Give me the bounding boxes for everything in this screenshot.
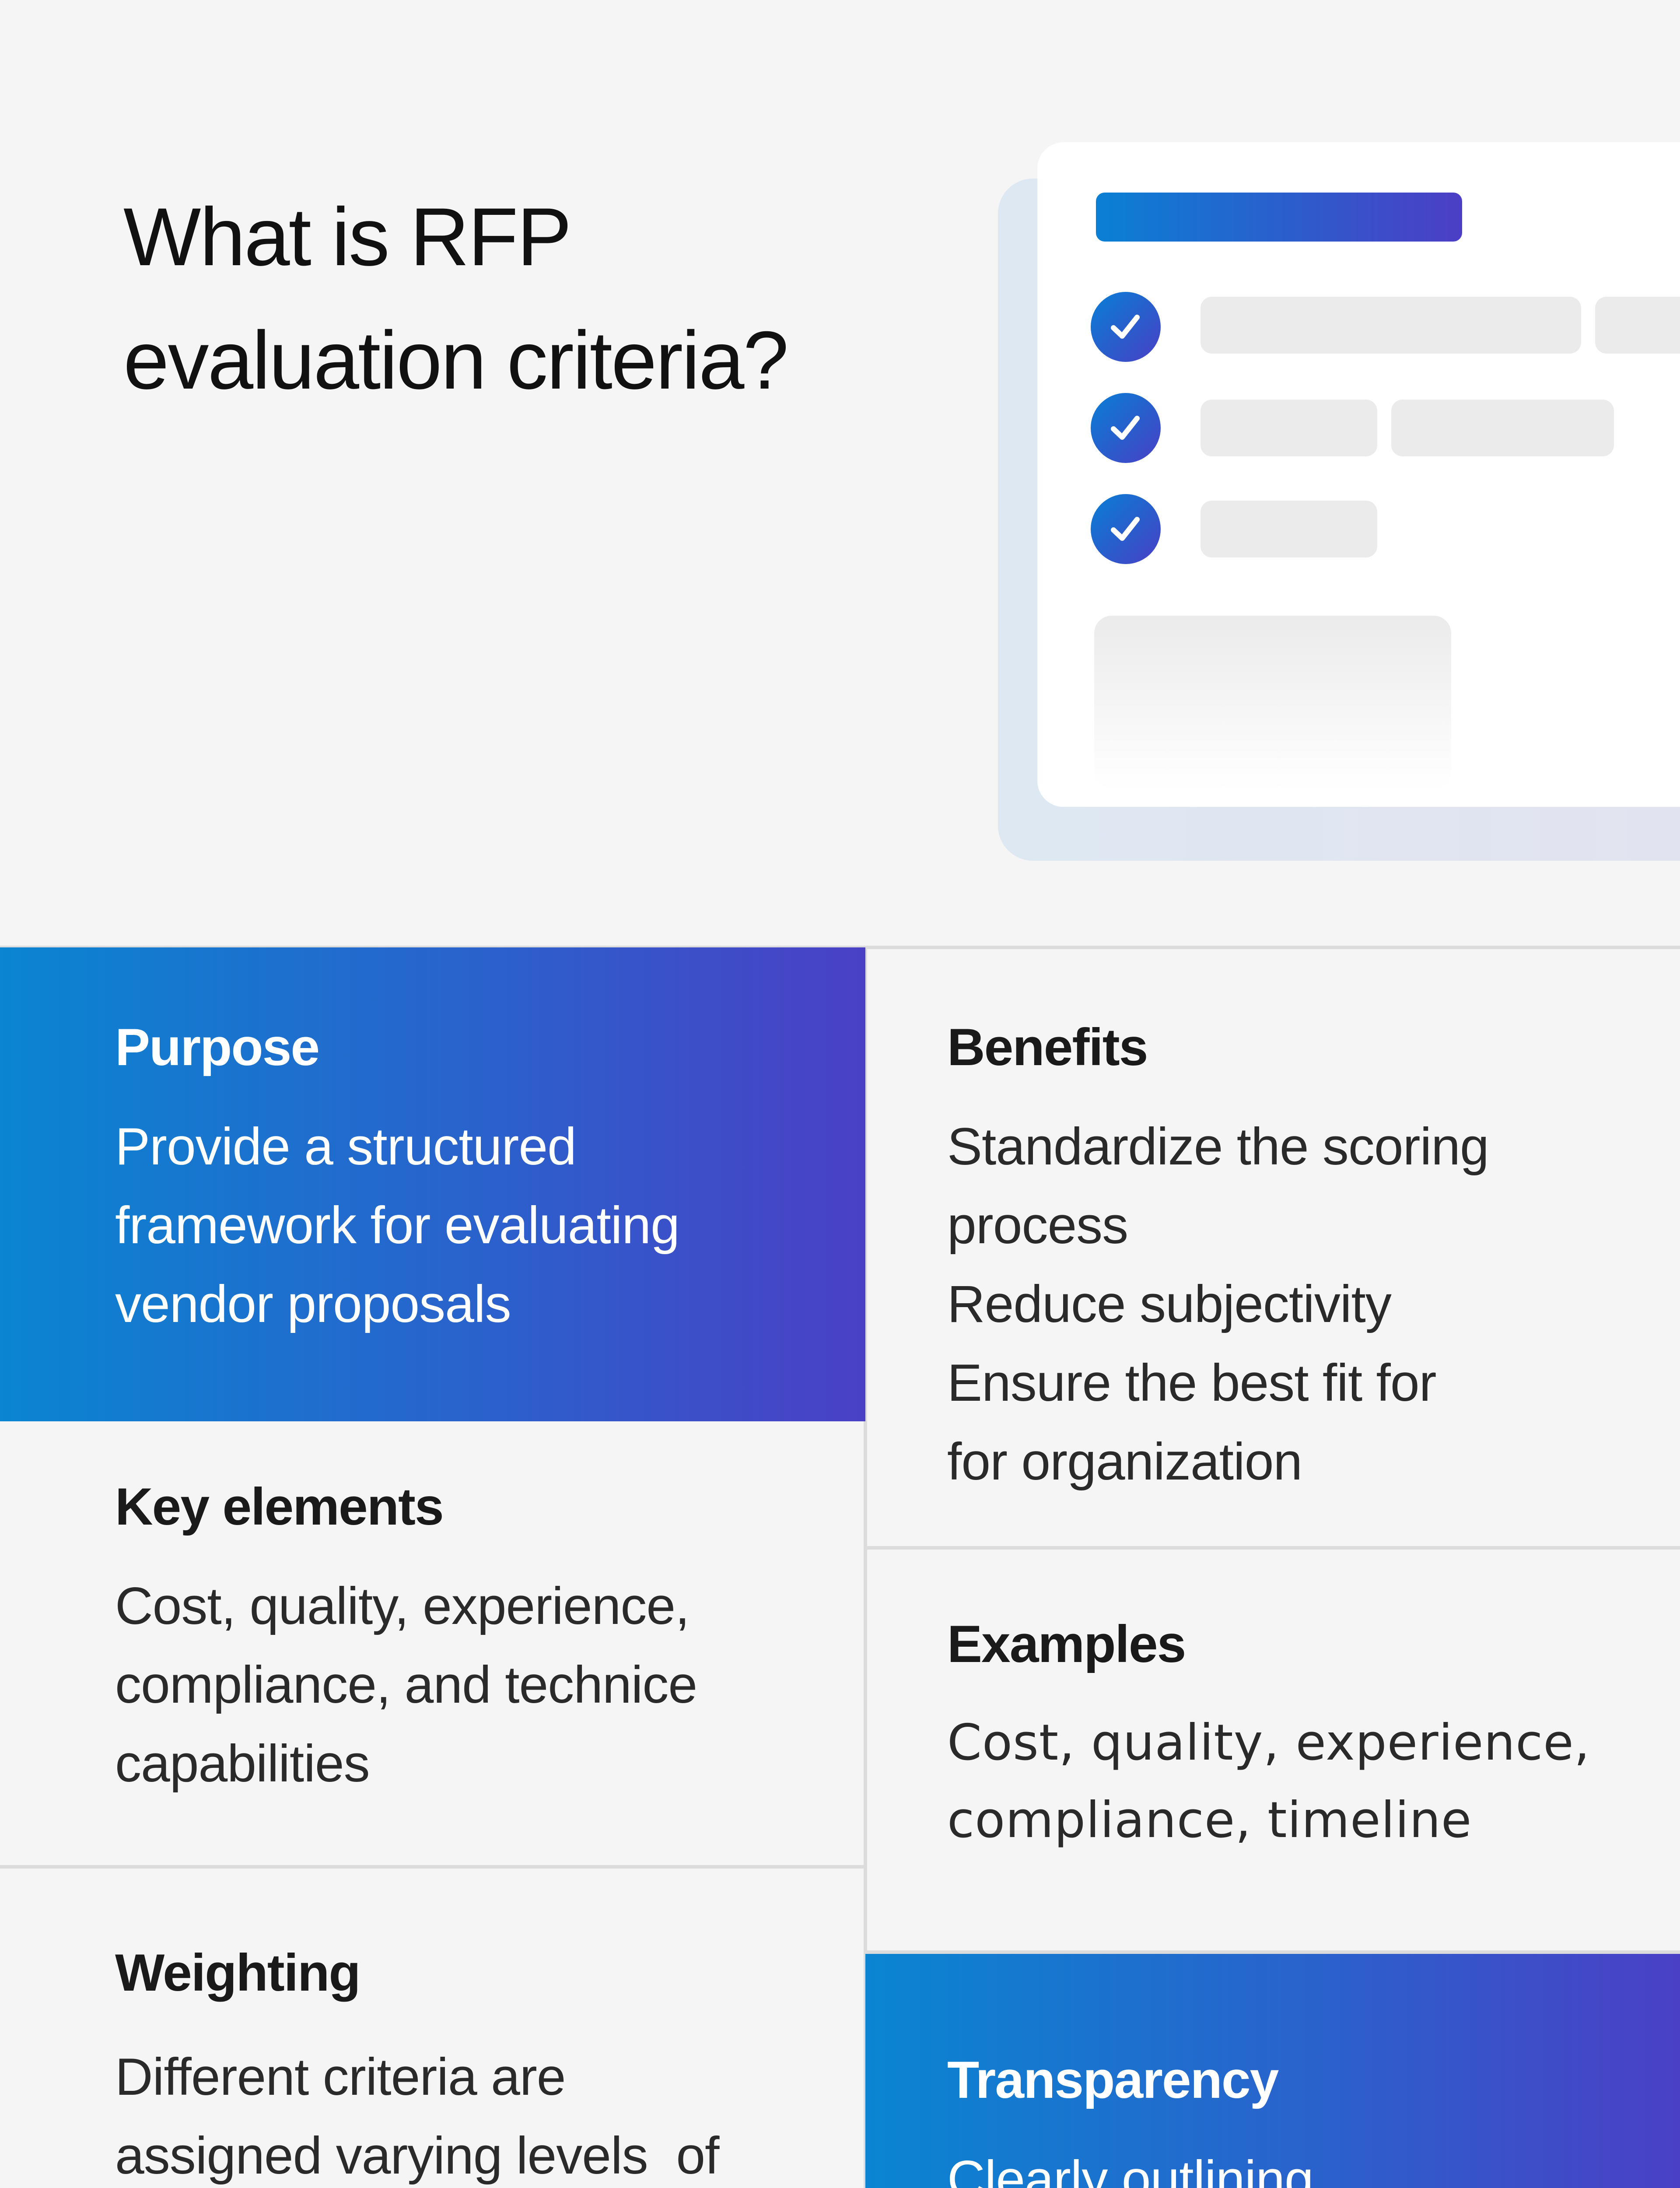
title: evaluation criteria?: [123, 314, 788, 406]
panel: benefits: [867, 949, 1680, 1546]
text: benefits: Reduce subjectivity: [947, 1275, 1391, 1333]
text: key elements: compliance, and technice: [115, 1655, 697, 1714]
header bar: [1096, 193, 1462, 242]
placeholder box: [1094, 616, 1451, 789]
text: purpose: Provide a structured: [115, 1117, 576, 1176]
placeholder bars: [1037, 142, 1680, 807]
heading: key elements: Key elements: [115, 1477, 443, 1536]
text: examples: Cost, quality, experience,: [947, 1714, 1590, 1771]
heading: purpose: Purpose: [115, 1018, 319, 1076]
text: weighting: Different criteria are: [115, 2048, 566, 2106]
text: examples: compliance, timeline: [947, 1791, 1472, 1849]
text: weighting: assigned varying levels of: [115, 2126, 719, 2185]
panel: purpose: [0, 947, 865, 1421]
heading: benefits: Benefits: [947, 1018, 1147, 1076]
grid dividers: [0, 946, 1680, 949]
text: examples: [947, 1704, 1590, 1859]
panel: transparency: [865, 1954, 1680, 2188]
text: benefits: Ensure the best fit for: [947, 1353, 1436, 1412]
text: key elements: [115, 1567, 697, 1803]
check icon 3: [1091, 494, 1161, 564]
heading: transparency: Transparency: [947, 2051, 1278, 2109]
text: benefits: Standardize the scoring: [947, 1117, 1489, 1176]
heading: examples: Examples: [947, 1615, 1185, 1673]
illustration: checklist card: [998, 142, 1680, 861]
text: benefits: process: [947, 1196, 1128, 1255]
text: purpose: framework for evaluating: [115, 1196, 679, 1255]
title: What is RFP: [123, 191, 570, 283]
text: benefits: for organization: [947, 1432, 1302, 1491]
text: purpose: [115, 1107, 679, 1343]
check icon 2: [1091, 393, 1161, 463]
panel: key elements: [0, 1423, 864, 1865]
text: purpose: vendor proposals: [115, 1275, 511, 1333]
heading: weighting: Weighting: [115, 1943, 360, 2002]
check icon 1: [1091, 292, 1161, 362]
text: benefits: [947, 1107, 1489, 1501]
card shadow: [998, 179, 1680, 861]
title: [123, 175, 788, 422]
text: weighting: [115, 2037, 719, 2188]
panel: weighting: [0, 1869, 864, 2188]
text: key elements: capabilities: [115, 1734, 370, 1793]
white card: [1037, 142, 1680, 807]
text: key elements: Cost, quality, experience,: [115, 1577, 689, 1635]
panel: examples: [867, 1550, 1680, 1950]
